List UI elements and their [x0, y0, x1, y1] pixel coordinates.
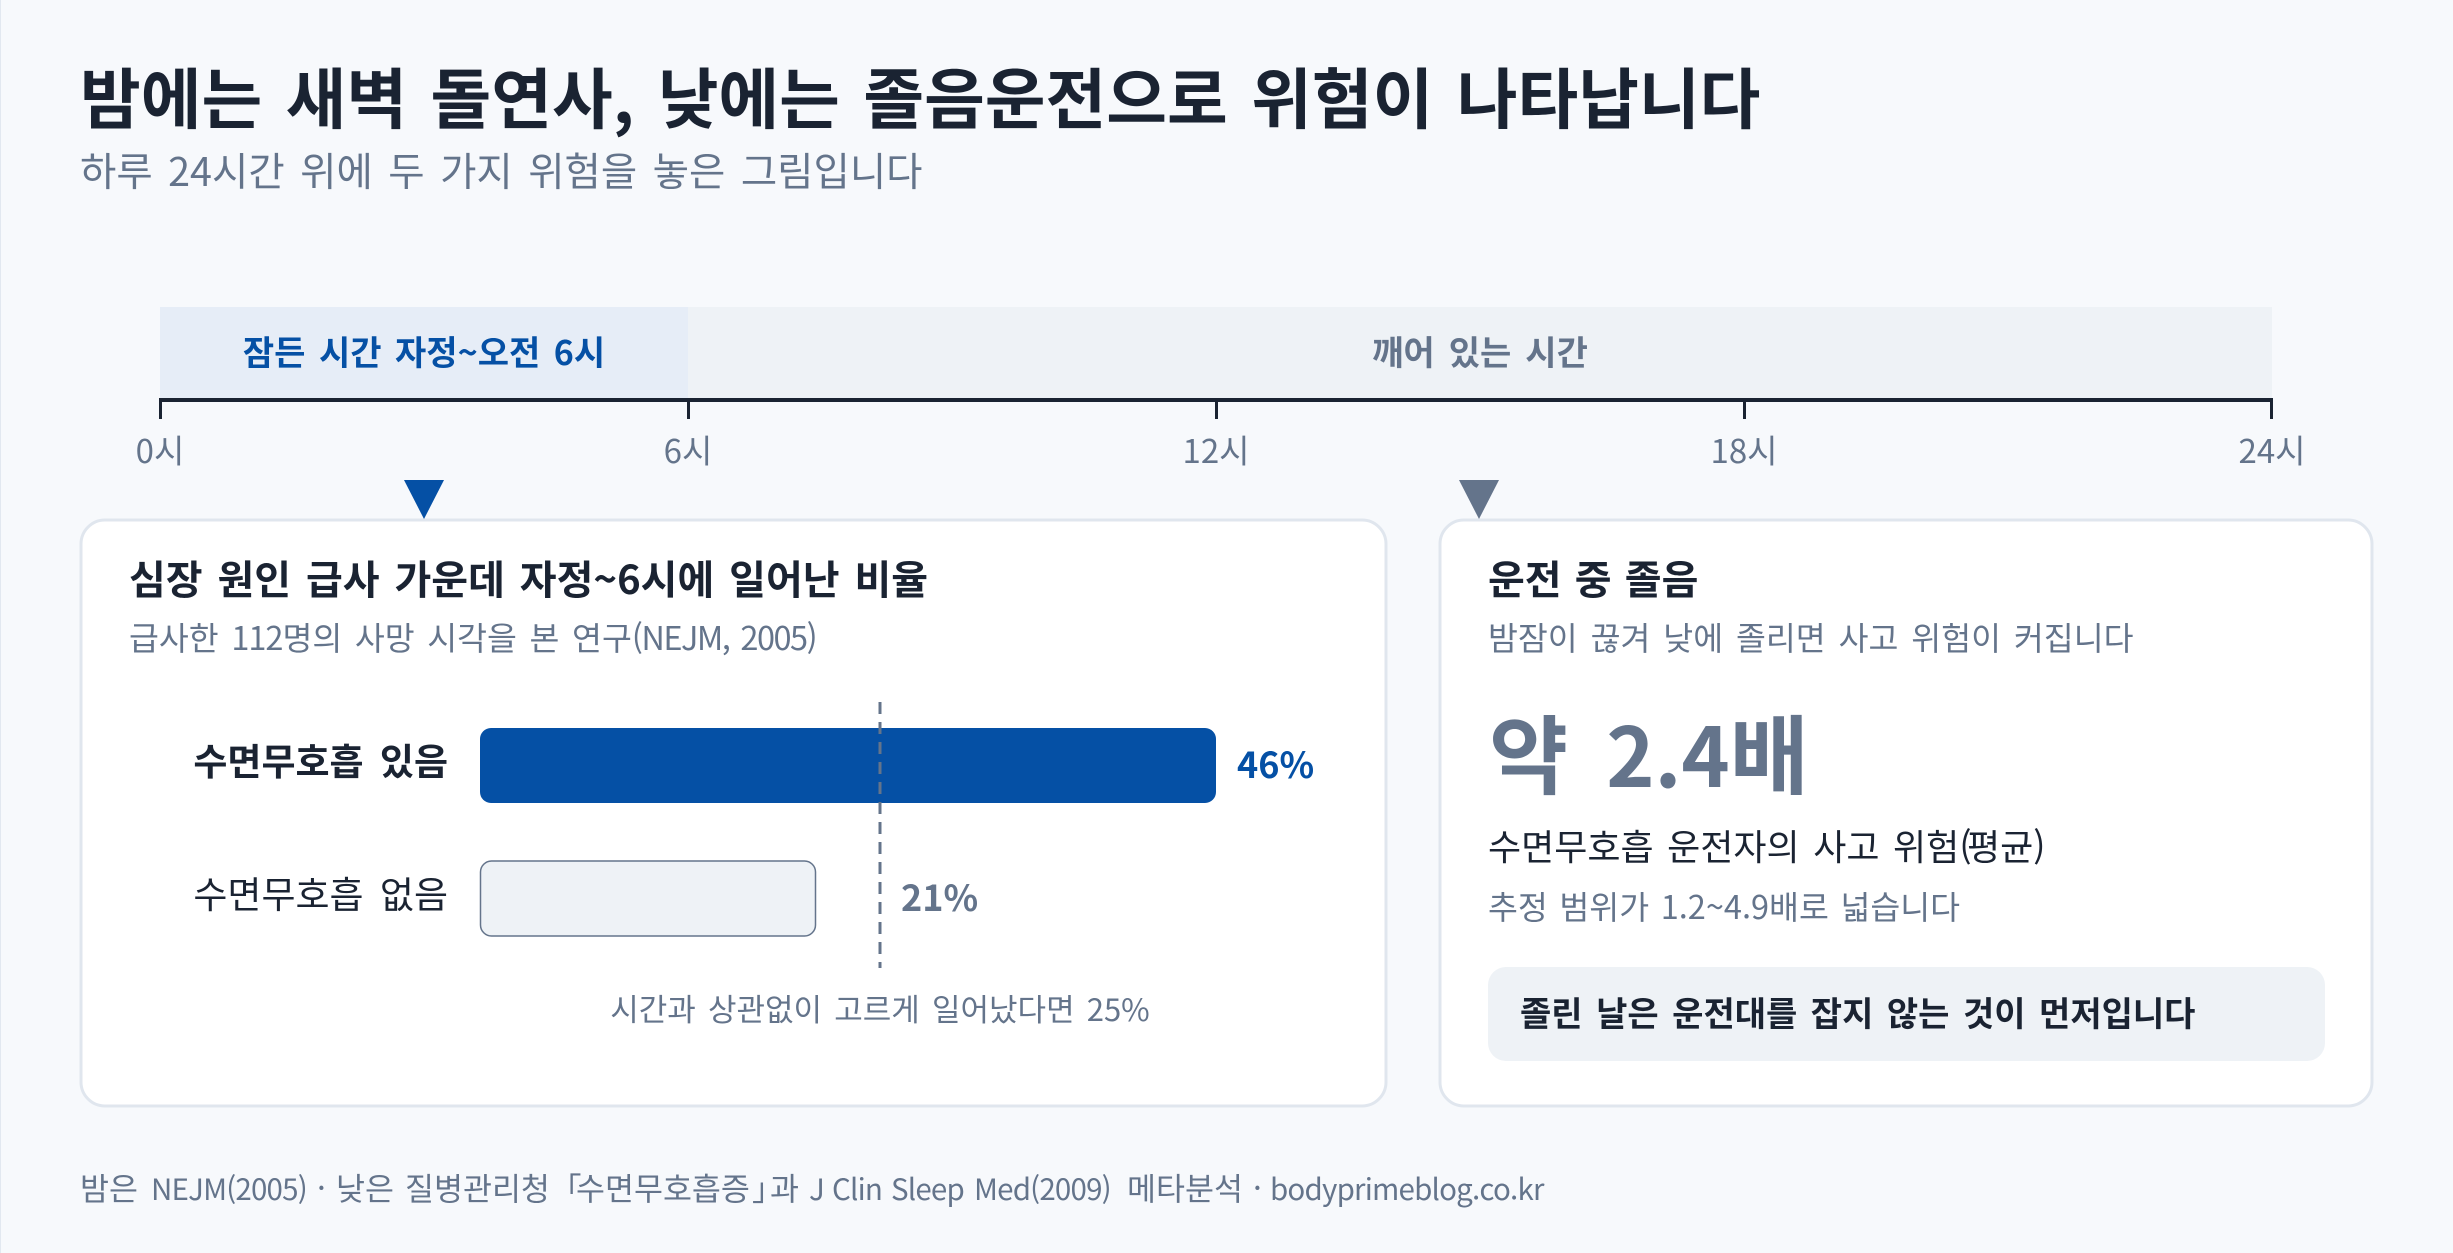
subtitle: 하루 24시간 위에 두 가지 위험을 놓은 그림입니다 [80, 141, 923, 198]
callout [1488, 967, 2325, 1061]
footer source: · [317, 1164, 326, 1210]
time axis [136, 398, 2306, 473]
title: 밤에는 새벽 돌연사, 낮에는 졸음운전으로 위험이 나타납니다 [80, 47, 1760, 143]
footer source: NEJM(2005) [151, 1167, 307, 1209]
big number: 약 2.4배 [1489, 687, 1809, 812]
footer source: bodyprimeblog.co.kr [1270, 1167, 1545, 1209]
bar: without sleep apnea: 수면무호흡 없음 [193, 865, 448, 919]
bar: without sleep apnea: 21% [901, 870, 978, 922]
bar: without sleep apnea [193, 861, 978, 936]
footer source: 과 [770, 1164, 799, 1210]
panel heading: 운전 중 졸음 [1488, 548, 1698, 606]
time axis: 0시 [136, 425, 184, 473]
callout: 졸린 날은 운전대를 잡지 않는 것이 먼저입니다 [1520, 987, 2195, 1036]
footer source: Med(2009) [974, 1167, 1111, 1209]
footer source: 질병관리청 [405, 1164, 550, 1210]
footer source: Sleep [891, 1167, 964, 1209]
panel subheading: 밤잠이 끊겨 낮에 졸리면 사고 위험이 커집니다 [1488, 613, 2134, 660]
footer source: 「 [550, 1164, 582, 1210]
stat description: 수면무호흡 운전자의 사고 위험(평균) [1488, 819, 2042, 871]
time axis: 24시 [2238, 425, 2306, 473]
timeline [136, 307, 2306, 473]
band: waking hours [688, 307, 2272, 400]
band: sleeping hours: 잠든 시간 자정~오전 6시 [243, 326, 605, 375]
range note: 추정 범위가 1.2~4.9배로 넓습니다 [1488, 882, 1960, 929]
panel subheading: 급사한 112명의 사망 시각을 본 연구(NEJM, 2005) [129, 613, 816, 660]
footer source: 」 [752, 1164, 784, 1210]
time axis: 12시 [1182, 425, 1250, 473]
band: sleeping hours [160, 307, 688, 400]
marker: night arrow [404, 480, 444, 519]
panel: daytime drowsy driving [1440, 520, 2372, 1106]
footer source: 밤은 [80, 1164, 138, 1210]
panel: night sudden death [81, 520, 1386, 1106]
footer source: 낮은 [336, 1164, 394, 1210]
time axis: 6시 [664, 425, 712, 473]
bar: with sleep apnea: 46% [1237, 737, 1314, 789]
footer source: J [809, 1167, 824, 1209]
bar chart [193, 702, 1314, 1030]
reference line: 25%: 시간과 상관없이 고르게 일어났다면 25% [610, 985, 1150, 1030]
panel heading: 심장 원인 급사 가운데 자정~6시에 일어난 비율 [129, 548, 928, 606]
footer source: Clin [832, 1167, 882, 1209]
footer source: · [1253, 1164, 1262, 1210]
footer source: 수면무호흡증 [576, 1164, 750, 1210]
footer source: 메타분석 [1127, 1164, 1243, 1210]
band: waking hours: 깨어 있는 시간 [1372, 326, 1588, 375]
bar: with sleep apnea [193, 728, 1314, 803]
marker: day arrow [1459, 480, 1499, 519]
bar: with sleep apnea: 수면무호흡 있음 [193, 732, 448, 786]
time axis: 18시 [1710, 425, 1778, 473]
